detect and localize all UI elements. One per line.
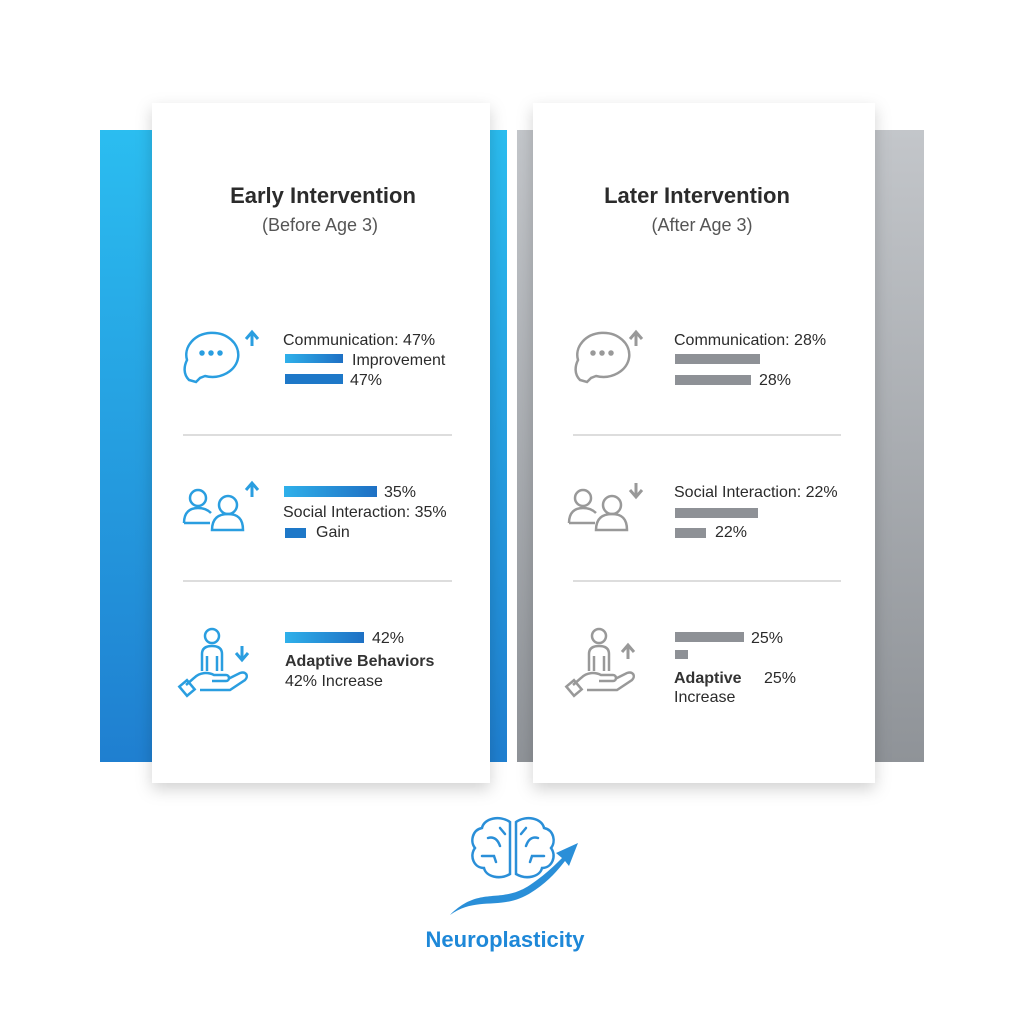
heading: neuroplasticity: Neuroplasticity bbox=[426, 927, 585, 952]
text block: social: Social Interaction: 35% bbox=[283, 504, 447, 521]
text block: communication later: Communication: 28% bbox=[674, 332, 826, 349]
text block: communication bbox=[283, 332, 446, 389]
text block: adaptive later: Adaptive bbox=[674, 670, 742, 687]
text block: communication later: 28% bbox=[759, 372, 791, 389]
text block: communication later bbox=[674, 332, 826, 389]
text block: social: Gain bbox=[316, 524, 350, 541]
panel: later card bbox=[533, 103, 875, 783]
heading: early: (Before Age 3) bbox=[262, 215, 378, 235]
text block: adaptive bbox=[285, 630, 434, 690]
text block: communication: 47% bbox=[350, 372, 382, 389]
heading: later: Later Intervention bbox=[604, 183, 790, 208]
text block: communication: Improvement bbox=[352, 352, 446, 369]
text block: adaptive later: Increase bbox=[674, 689, 735, 706]
heading: early: Early Intervention bbox=[230, 183, 416, 208]
text block: adaptive: 42% Increase bbox=[285, 673, 383, 690]
icon: chat bubble gray bbox=[576, 332, 642, 382]
icon: chat bubble bbox=[185, 332, 258, 382]
heading: early bbox=[230, 183, 416, 235]
text block: adaptive: 42% bbox=[372, 630, 404, 647]
text block: social bbox=[283, 484, 447, 541]
icon: brain with arrow bbox=[450, 818, 578, 915]
text block: social later: Social Interaction: 22% bbox=[674, 484, 838, 501]
text block: adaptive later bbox=[674, 630, 796, 706]
text block: adaptive later: 25% bbox=[764, 670, 796, 687]
text block: adaptive later: 25% bbox=[751, 630, 783, 647]
icon: person with hand bbox=[179, 629, 248, 696]
text block: communication: Communication: 47% bbox=[283, 332, 435, 349]
heading: later: (After Age 3) bbox=[651, 215, 753, 235]
icon: person with hand gray bbox=[566, 629, 634, 696]
heading: later bbox=[604, 183, 790, 235]
text block: adaptive: Adaptive Behaviors bbox=[285, 653, 434, 670]
icon: people bbox=[184, 483, 258, 530]
icon: people gray bbox=[569, 483, 642, 530]
text block: social later bbox=[674, 484, 838, 541]
panel: early background bbox=[100, 130, 507, 762]
text block: social later: 22% bbox=[715, 524, 747, 541]
panel: early card bbox=[152, 103, 490, 783]
text block: social: 35% bbox=[384, 484, 416, 501]
panel: later background bbox=[517, 130, 924, 762]
